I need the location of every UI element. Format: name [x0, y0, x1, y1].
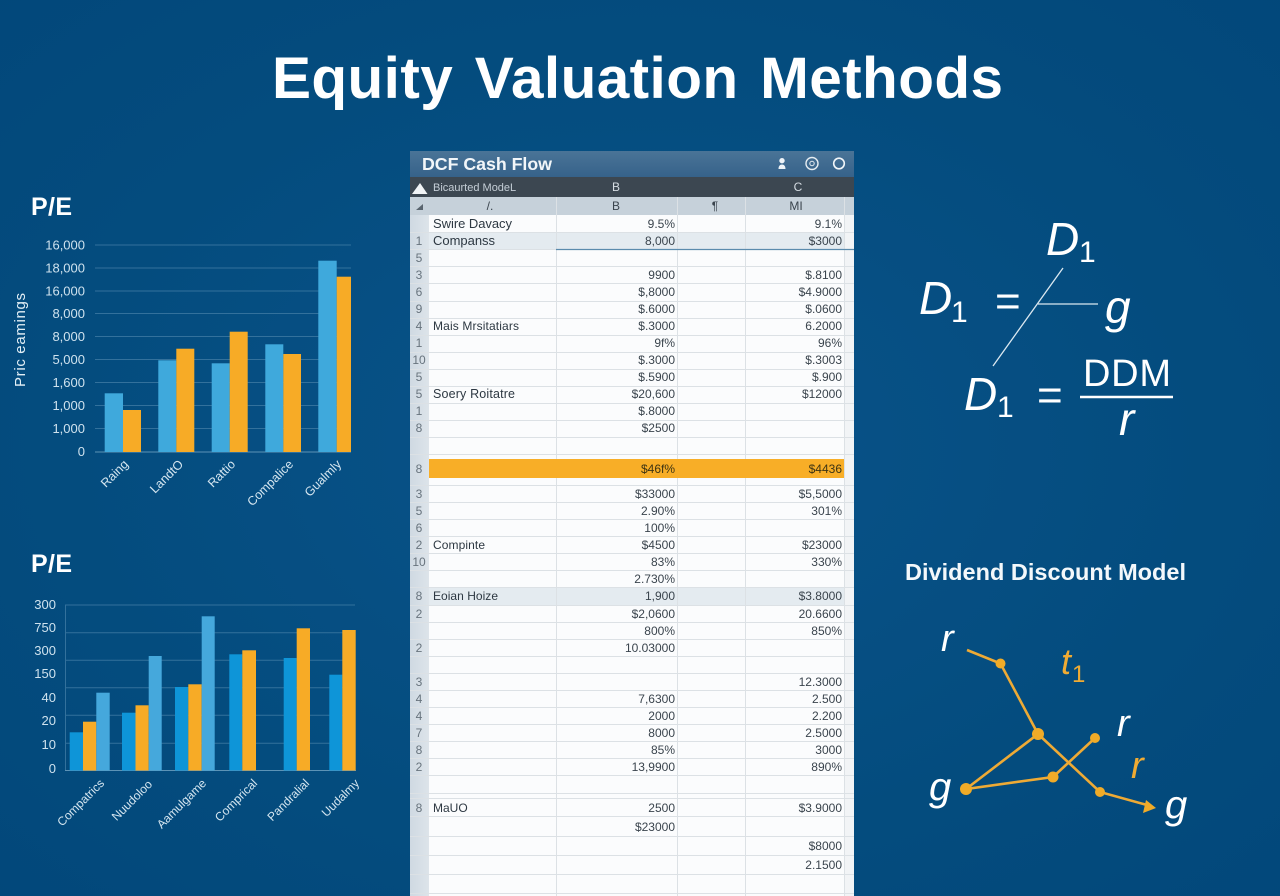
panel: top P/E chart: [12, 193, 351, 509]
highlighted row: [429, 459, 844, 478]
row labels and values: 9: [416, 302, 423, 316]
row labels and values: 2.200: [812, 709, 842, 723]
row labels and values: 9.1%: [815, 217, 842, 231]
row labels and values: 2.1500: [805, 858, 842, 872]
row labels and values: $3.9000: [799, 801, 842, 815]
y axis labels: 5,000: [52, 352, 85, 367]
row labels and values: 3: [416, 268, 423, 282]
row labels and values: [412, 216, 842, 872]
row labels and values: 5: [416, 370, 423, 384]
row labels and values: Mais Mrsitatiars: [433, 319, 519, 333]
y axis labels: 0: [78, 444, 85, 459]
formula: D1 equation: g: [1105, 281, 1131, 333]
row labels and values: $8000: [809, 839, 842, 853]
row labels and values: $12000: [802, 387, 842, 401]
row labels and values: 8: [416, 462, 423, 476]
dark toolbar: C: [794, 180, 803, 194]
row labels and values: 100%: [644, 521, 675, 535]
row labels and values: 8: [416, 743, 423, 757]
row labels and values: $23000: [635, 820, 675, 834]
formula: DDM fraction: [964, 353, 1173, 445]
row labels and values: $.8000: [638, 404, 675, 418]
formula: D1 equation: =: [995, 277, 1021, 326]
variable labels: g: [1165, 783, 1187, 827]
formula: DDM fraction: D: [964, 368, 997, 420]
category labels: Uudalmy: [319, 776, 362, 820]
y axis labels: 18,000: [45, 260, 85, 276]
row labels and values: 8: [416, 801, 423, 815]
y axis labels: 1,600: [52, 375, 85, 390]
panel: DCF spreadsheet: [410, 151, 854, 896]
row labels and values: 10: [412, 555, 426, 569]
row labels and values: 890%: [811, 760, 842, 774]
row labels and values: 301%: [811, 504, 842, 518]
column header row: ¶: [712, 199, 718, 213]
shaded rows: [429, 232, 844, 605]
row labels and values: $.900: [812, 370, 842, 384]
variable labels: t: [1061, 641, 1073, 682]
row labels and values: 330%: [811, 555, 842, 569]
icon: circle: [834, 158, 844, 169]
row labels and values: 5: [416, 504, 423, 518]
formula: DDM fraction: DDM: [1083, 353, 1171, 395]
row labels and values: 6: [416, 285, 423, 299]
formula: D1 equation: D: [919, 272, 952, 324]
y axis labels: 0: [49, 761, 56, 776]
row labels and values: 10: [412, 353, 426, 367]
row labels and values: 2.730%: [634, 572, 675, 586]
row labels and values: $3000: [809, 234, 842, 248]
category labels: Comprical: [212, 776, 260, 824]
category labels: Aamulgame: [154, 776, 209, 831]
row labels and values: $.3000: [638, 319, 675, 333]
dark toolbar: [410, 177, 854, 197]
row labels and values: 2500: [648, 801, 675, 815]
row labels and values: $33000: [635, 487, 675, 501]
row labels and values: 8000: [648, 726, 675, 740]
icon: arrow head: [1143, 800, 1156, 813]
row labels and values: MaUO: [433, 801, 468, 815]
y axis title: Pric eamings: [12, 293, 29, 387]
category labels: Gualmly: [302, 457, 345, 500]
row labels and values: 2000: [648, 709, 675, 723]
row labels and values: $4.9000: [799, 285, 842, 299]
category labels: [54, 776, 362, 831]
row labels and values: 9.5%: [648, 217, 675, 231]
row labels and values: 4: [416, 709, 423, 723]
row labels and values: Eoian Hoize: [433, 589, 498, 603]
nodes: [960, 658, 1105, 797]
row labels and values: 85%: [651, 743, 675, 757]
y axis labels: 300: [34, 597, 56, 612]
row labels and values: $,8000: [638, 285, 675, 299]
row labels and values: 5: [416, 387, 423, 401]
row labels and values: 83%: [651, 555, 675, 569]
row labels and values: 12.3000: [799, 675, 842, 689]
variable labels: r: [941, 618, 955, 660]
row labels and values: $3.8000: [799, 589, 842, 603]
variable labels: r: [1117, 703, 1131, 745]
row labels and values: $46f%: [641, 462, 675, 476]
row labels and values: $4436: [809, 462, 842, 476]
row labels and values: $2500: [642, 421, 675, 435]
category labels: Compalice: [244, 457, 296, 509]
row labels and values: 96%: [818, 336, 842, 350]
row labels and values: 13,9900: [632, 760, 675, 774]
row labels and values: $2,0600: [632, 607, 675, 621]
row labels and values: $4500: [642, 538, 675, 552]
formula: D1 equation: D: [1046, 213, 1079, 265]
row labels and values: $.6000: [638, 302, 675, 316]
column header row: MI: [789, 199, 803, 213]
y axis labels: 20: [42, 713, 56, 728]
row labels and values: $.8100: [805, 268, 842, 282]
variable labels: r: [1131, 745, 1145, 787]
column header row: B: [612, 199, 620, 213]
row labels and values: 850%: [811, 624, 842, 638]
row labels and values: 9900: [648, 268, 675, 282]
title: Equity Valuation Methods: [272, 46, 1003, 111]
row labels and values: 1,900: [645, 589, 675, 603]
row labels and values: 3: [416, 675, 423, 689]
row labels and values: 3000: [815, 743, 842, 757]
y axis labels: 16,000: [45, 284, 85, 298]
y axis labels: [45, 238, 85, 459]
y axis labels: 150: [34, 666, 56, 681]
category labels: [98, 457, 345, 509]
y axis labels: 10: [42, 737, 56, 752]
formula: D1 equation: [919, 213, 1131, 366]
row labels and values: 1: [416, 404, 423, 418]
panel: bottom P/E chart: [31, 550, 362, 831]
row labels and values: 2.90%: [641, 504, 675, 518]
y axis labels: 300: [34, 643, 56, 658]
column header row: [410, 197, 854, 215]
row labels and values: 8: [416, 421, 423, 435]
row labels and values: 2.5000: [805, 726, 842, 740]
row labels and values: 2: [416, 641, 423, 655]
row labels and values: 2.500: [812, 692, 842, 706]
y axis labels: 8,000: [52, 306, 85, 321]
row labels and values: 1: [416, 234, 423, 248]
heading: bottom P/E: P/E: [31, 550, 72, 578]
row labels and values: 7,6300: [638, 692, 675, 706]
row labels and values: Soery Roitatre: [433, 387, 515, 401]
row labels and values: 2: [416, 607, 423, 621]
formula: DDM fraction: =: [1037, 371, 1063, 420]
category labels: Pandralial: [264, 776, 312, 824]
dark toolbar: Bicaurted ModeL: [433, 182, 516, 194]
variable labels: g: [929, 765, 951, 809]
title bar: [410, 151, 854, 177]
formula: D1 equation: 1: [1079, 236, 1096, 269]
row labels and values: 8: [416, 589, 423, 603]
dark toolbar: B: [612, 180, 620, 194]
row labels and values: $23000: [802, 538, 842, 552]
column header row: /.: [487, 199, 493, 213]
row labels and values: 1: [416, 336, 423, 350]
y axis labels: 1,000: [52, 421, 85, 436]
row labels and values: $.3000: [638, 353, 675, 367]
row labels and values: Companss: [433, 233, 496, 248]
icon: person: [778, 158, 786, 169]
category labels: Nuudoloo: [109, 777, 155, 823]
y axis labels: 1,000: [52, 398, 85, 413]
row labels and values: 2: [416, 760, 423, 774]
row labels and values: 2: [416, 538, 423, 552]
icon: circled target: [806, 158, 818, 170]
row labels and values: 10.03000: [625, 641, 675, 655]
row labels and values: 3: [416, 487, 423, 501]
row labels and values: 20.6600: [799, 607, 842, 621]
row labels and values: 4: [416, 692, 423, 706]
heading: top P/E: P/E: [31, 193, 72, 221]
category labels: Compatrics: [54, 776, 107, 829]
row labels and values: 4: [416, 319, 423, 333]
y axis labels: 8,000: [52, 329, 85, 344]
row labels and values: $.5900: [638, 370, 675, 384]
row labels and values: 5: [416, 251, 423, 265]
formula: DDM fraction: 1: [997, 391, 1014, 424]
row labels and values: 6.2000: [805, 319, 842, 333]
y axis labels: 16,000: [45, 238, 85, 252]
row labels and values: $5,5000: [799, 487, 842, 501]
row labels and values: 800%: [644, 624, 675, 638]
row labels and values: 8,000: [645, 234, 675, 248]
diagram: dividend discount network: [929, 618, 1187, 827]
y axis labels: 750: [34, 620, 56, 635]
formula: D1 equation: 1: [951, 296, 968, 329]
row labels and values: $.3003: [805, 353, 842, 367]
row labels and values: Swire Davacy: [433, 216, 512, 231]
row labels and values: 6: [416, 521, 423, 535]
heading: Dividend Discount Model: Dividend Discount Model: [905, 559, 1186, 585]
category labels: Rattio: [205, 457, 238, 490]
y axis labels: 40: [42, 690, 56, 705]
y axis labels: [34, 597, 56, 776]
bars: [105, 261, 351, 452]
variable labels: 1: [1072, 661, 1085, 688]
category labels: Raing: [98, 457, 131, 490]
formula: DDM fraction: r: [1119, 393, 1136, 445]
row labels and values: Compinte: [433, 538, 485, 552]
row labels and values: $20,600: [632, 387, 675, 401]
title bar: DCF Cash Flow: [422, 154, 552, 174]
category labels: LandtO: [147, 457, 186, 496]
row labels and values: $.0600: [805, 302, 842, 316]
variable labels: [929, 618, 1187, 827]
bars: [70, 616, 356, 770]
row labels and values: 7: [416, 726, 423, 740]
row labels and values: 9f%: [654, 336, 675, 350]
